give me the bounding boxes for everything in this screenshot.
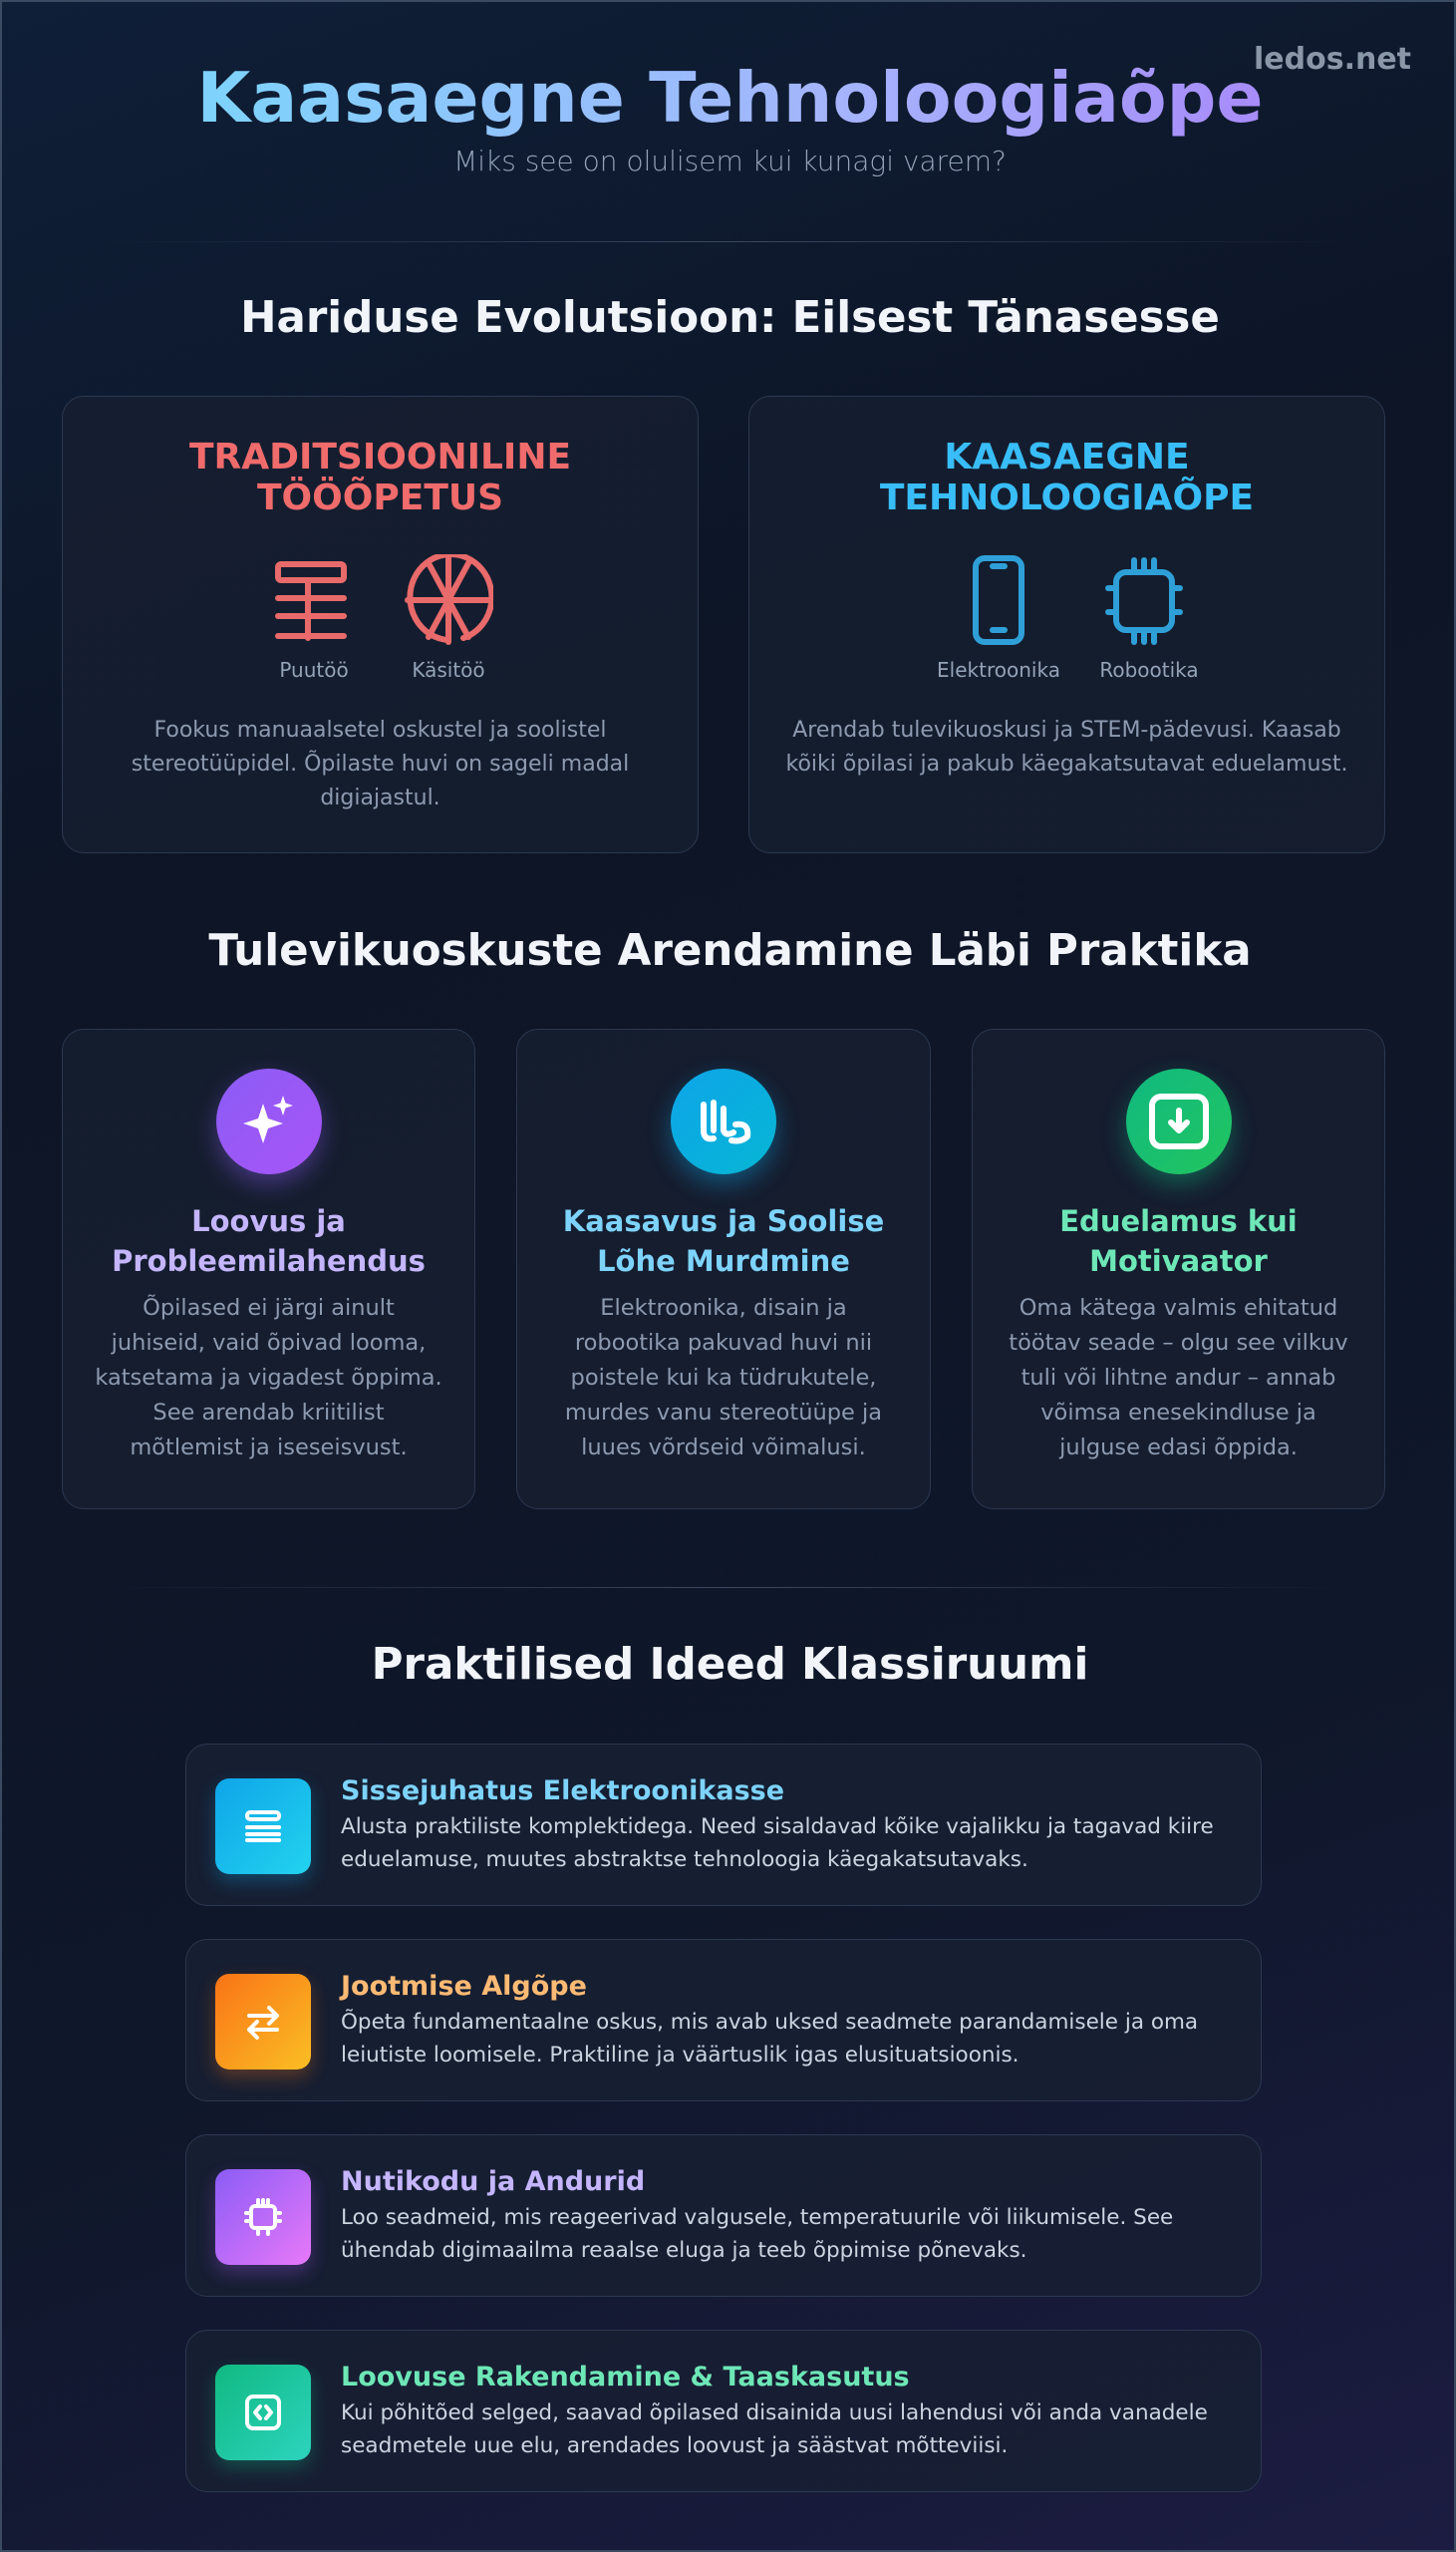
panel: traditional xyxy=(62,396,699,853)
item: soldering xyxy=(185,1939,1262,2101)
card: success xyxy=(972,1029,1385,1509)
card text: See arendab kriitilist xyxy=(152,1400,385,1426)
card title: Kaasavus ja Soolise Lõhe Murdmine xyxy=(563,1204,884,1278)
card text: Õpilased ei järgi ainult xyxy=(143,1295,395,1321)
card text: juhiseid, vaid õpivad looma, xyxy=(112,1330,426,1356)
card text: tuli või lihtne andur – annab xyxy=(1021,1365,1335,1391)
item text: Alusta praktiliste komplektidega. Need sisaldavad kõike vajalikku ja tagavad kiire eduelamuse, muutes abstraktse tehnoloogia käegakatsutavaks. xyxy=(341,1814,1214,1872)
icon: arrows xyxy=(215,1974,311,2070)
panel title: TEHNOLOOGIAÕPE xyxy=(880,478,1254,518)
panel title: TÖÖÕPETUS xyxy=(257,478,503,518)
icon: sparkles xyxy=(215,1069,321,1174)
icon: code box xyxy=(215,2365,311,2460)
subtitle: Miks see on olulisem kui kunagi varem? xyxy=(453,145,1007,177)
card text: mõtlemist ja iseseisvust. xyxy=(130,1435,408,1460)
icon: woodwork xyxy=(275,561,347,641)
icon: chip xyxy=(1105,557,1183,645)
panel title xyxy=(880,437,1254,518)
label: Robootika xyxy=(1099,658,1199,682)
description: Fookus manuaalsetel oskustel ja soolistel stereotüüpidel. Õpilaste huvi on sageli madal digiajastul. xyxy=(132,718,629,810)
item: creativity & reuse xyxy=(185,2330,1262,2492)
icon: handicraft xyxy=(405,554,493,645)
label: Puutöö xyxy=(279,658,349,682)
item title: Jootmise Algõpe xyxy=(341,1971,587,2002)
card title: Loovus ja Probleemilahendus xyxy=(112,1204,426,1278)
item title: Nutikodu ja Andurid xyxy=(341,2166,645,2197)
description: Arendab tulevikuoskusi ja STEM-pädevusi. Kaasab kõiki õpilasi ja pakub käegakatsutavat eduelamust. xyxy=(785,718,1347,777)
item: electronics xyxy=(185,1744,1262,1906)
card text: murdes vanu stereotüüpe ja xyxy=(565,1400,882,1426)
icon: download box xyxy=(1126,1069,1232,1174)
label: Käsitöö xyxy=(412,658,485,682)
item: smart home xyxy=(185,2134,1262,2297)
card text xyxy=(1009,1295,1348,1460)
watermark: ledos.net xyxy=(1254,42,1411,77)
card text: Oma kätega valmis ehitatud xyxy=(1019,1295,1337,1321)
icon: list xyxy=(215,1778,311,1874)
panel: modern xyxy=(748,396,1385,853)
icon: hand xyxy=(671,1069,776,1174)
panel title: TRADITSIOONILINE xyxy=(189,437,571,478)
label: Elektroonika xyxy=(937,658,1060,682)
heading: ideas: Praktilised Ideed Klassiruumi xyxy=(372,1640,1088,1690)
card text xyxy=(95,1294,442,1460)
item title: Sissejuhatus Elektroonikasse xyxy=(341,1775,784,1806)
card text: võimsa enesekindluse ja xyxy=(1040,1400,1316,1426)
title: Kaasaegne Tehnoloogiaõpe xyxy=(196,58,1264,139)
card text: poistele kui ka tüdrukutele, xyxy=(571,1365,876,1391)
card: inclusion xyxy=(516,1029,931,1509)
card text xyxy=(565,1295,882,1460)
heading: skills: Tulevikuoskuste Arendamine Läbi Praktika xyxy=(208,926,1252,976)
card text: luues võrdseid võimalusi. xyxy=(581,1435,866,1460)
panel title: KAASAEGNE xyxy=(944,437,1190,478)
panel title xyxy=(189,437,571,518)
card text: julguse edasi õppida. xyxy=(1059,1435,1298,1460)
card text: katsetama ja vigadest õppima. xyxy=(95,1365,442,1391)
icon: phone xyxy=(973,555,1024,645)
item title: Loovuse Rakendamine & Taaskasutus xyxy=(341,2362,910,2392)
card text: robootika pakuvad huvi nii xyxy=(575,1330,872,1356)
icon: chip xyxy=(215,2169,311,2265)
item text: Loo seadmeid, mis reageerivad valgusele, temperatuurile või liikumisele. See ühendab digimaailma reaalse eluga ja teeb õppimise põnevaks. xyxy=(341,2205,1173,2263)
card: creativity xyxy=(62,1029,475,1509)
card text: töötav seade – olgu see vilkuv xyxy=(1009,1330,1348,1356)
item text: Kui põhitõed selged, saavad õpilased disainida uusi lahendusi või anda vanadele seadmetele uue elu, arendades loovust ja säästvat mõtteviisi. xyxy=(341,2400,1208,2458)
heading: evolution: Hariduse Evolutsioon: Eilsest Tänasesse xyxy=(240,293,1220,343)
item text: Õpeta fundamentaalne oskus, mis avab uksed seadmete parandamisele ja oma leiutiste loomisele. Praktiline ja väärtuslik igas elusituatsioonis. xyxy=(341,2010,1198,2068)
card title: Eduelamus kui Motivaator xyxy=(1059,1204,1298,1278)
card text: Elektroonika, disain ja xyxy=(600,1295,847,1321)
